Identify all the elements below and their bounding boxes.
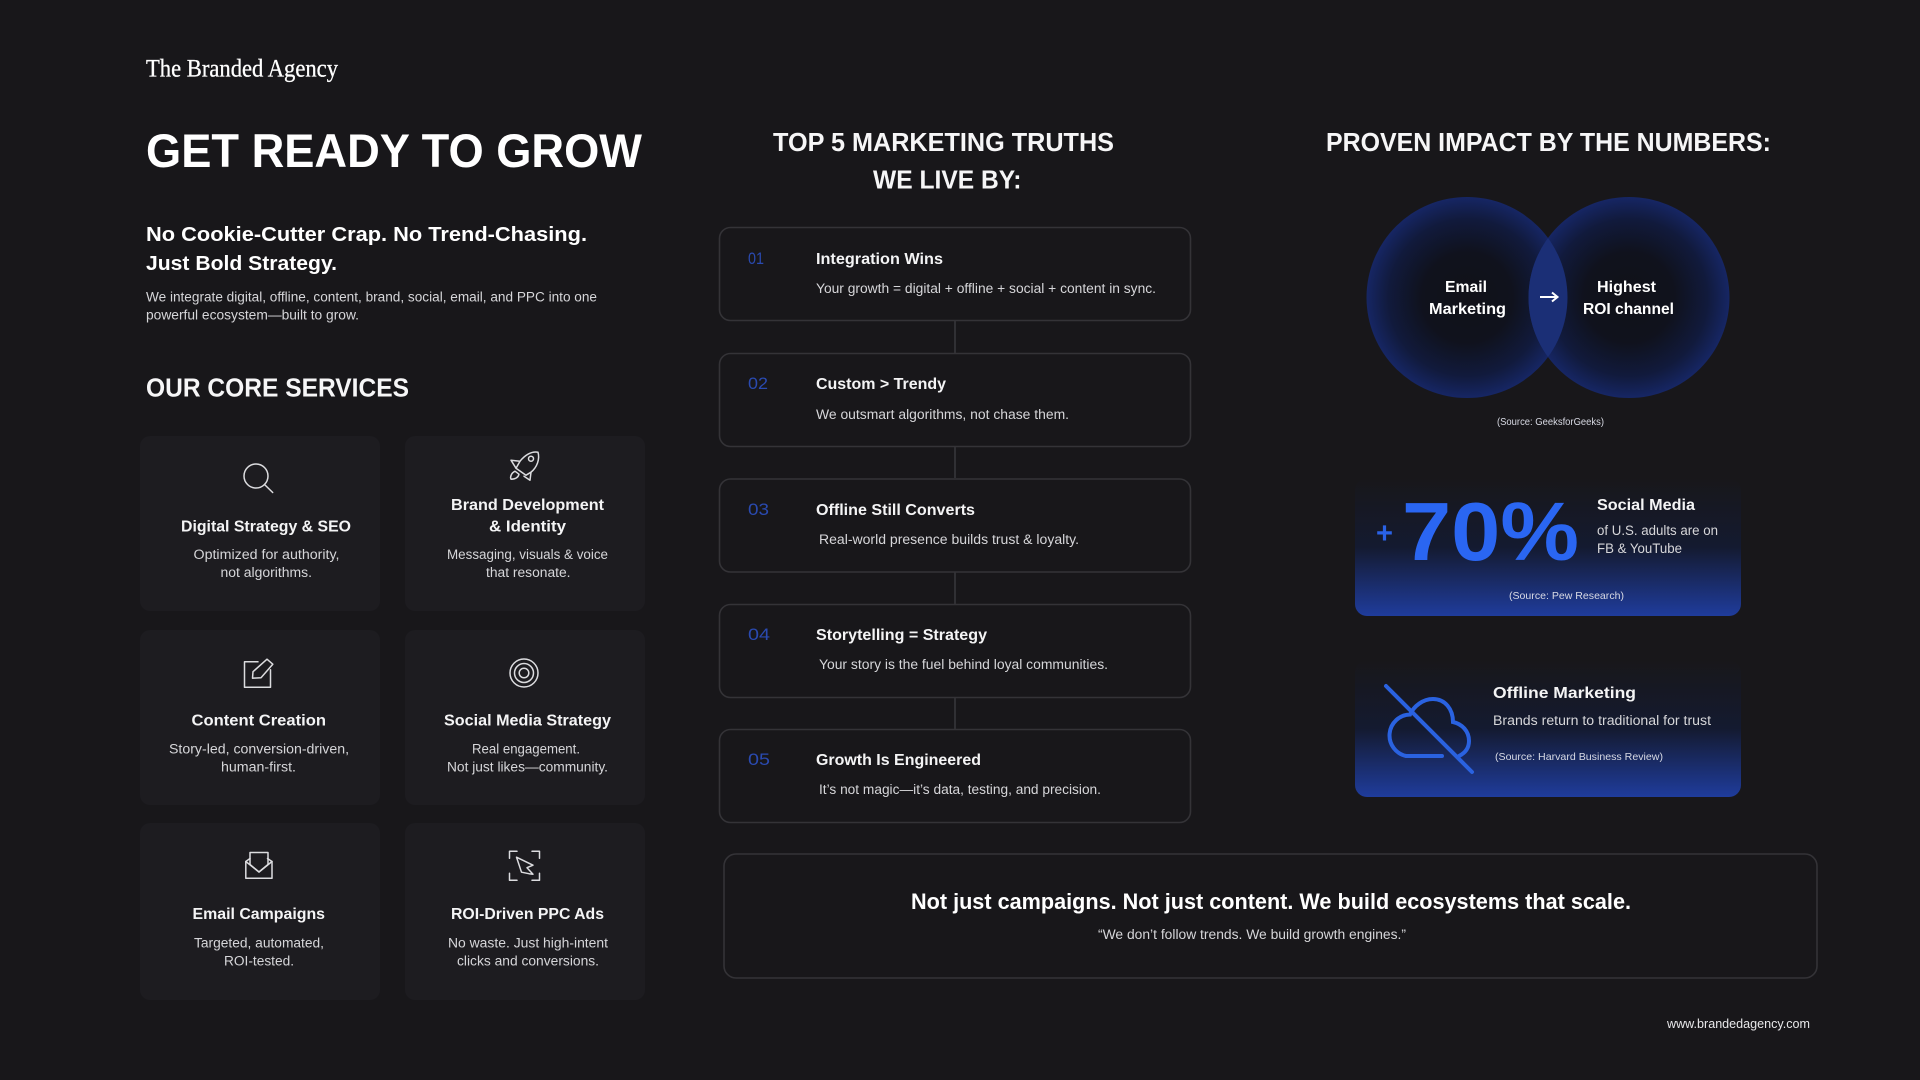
arrow xyxy=(1540,292,1558,302)
truth 03: Offline Still Converts xyxy=(816,502,975,519)
truth 03 xyxy=(720,479,1190,572)
card description: not algorithms. xyxy=(220,565,312,581)
card heading: Brand Development xyxy=(451,497,605,514)
heading: proven impact: PROVEN IMPACT BY THE NUMBERS: xyxy=(1326,129,1771,157)
venn diagram xyxy=(1366,197,1730,398)
icon: rocket xyxy=(511,452,539,480)
truth 03: 03 xyxy=(748,500,769,519)
website url: www.brandedagency.com xyxy=(1666,1016,1810,1031)
panel: social media strategy xyxy=(405,630,645,805)
card heading: Digital Strategy & SEO xyxy=(181,519,351,536)
big number: + xyxy=(1376,517,1393,550)
venn left label: Marketing xyxy=(1429,301,1506,318)
intro paragraph: We integrate digital, offline, content, brand, social, email, and PPC into one xyxy=(146,290,597,306)
heading: marketing truths: TOP 5 MARKETING TRUTHS xyxy=(773,129,1114,157)
card description xyxy=(169,741,349,775)
stat heading: Social Media xyxy=(1597,497,1695,514)
offline description: Brands return to traditional for trust xyxy=(1493,713,1711,729)
panel: digital strategy and seo xyxy=(140,436,380,611)
card description: ROI-tested. xyxy=(224,953,294,969)
icon: cursor in frame xyxy=(510,851,540,880)
panel: email campaigns xyxy=(140,823,380,1000)
icon: crossed-out cloud xyxy=(1386,686,1472,772)
truth 01 xyxy=(720,228,1190,320)
card description: that resonate. xyxy=(486,565,570,581)
truth 05: 05 xyxy=(748,750,770,769)
panel: ppc ads xyxy=(405,823,645,1000)
subheading: Just Bold Strategy. xyxy=(146,252,337,275)
connector lines xyxy=(954,321,956,729)
truth 05: It’s not magic—it’s data, testing, and precision. xyxy=(819,782,1101,798)
card description: human-first. xyxy=(221,759,296,775)
card heading: Email Campaigns xyxy=(192,906,325,923)
source note: (Source: GeeksforGeeks) xyxy=(1497,416,1604,428)
truth 02: 02 xyxy=(748,374,768,393)
card description xyxy=(448,935,608,969)
venn left label: Email xyxy=(1445,279,1487,296)
offline source: (Source: Harvard Business Review) xyxy=(1495,751,1663,763)
venn left label xyxy=(1429,279,1506,318)
panel: offline marketing xyxy=(1355,660,1741,797)
big number: 70% xyxy=(1402,485,1579,578)
truth 05 xyxy=(720,730,1190,822)
logo: The Branded Agency xyxy=(146,56,338,82)
card description: Not just likes—community. xyxy=(447,759,608,775)
truth 04: Your story is the fuel behind loyal communities. xyxy=(819,657,1108,673)
icon: envelope xyxy=(246,852,272,878)
card description: Targeted, automated, xyxy=(194,935,324,951)
truth 02: We outsmart algorithms, not chase them. xyxy=(816,407,1069,423)
truth 04: Storytelling = Strategy xyxy=(816,627,987,644)
card heading: & Identity xyxy=(489,519,566,536)
intro paragraph: powerful ecosystem—built to grow. xyxy=(146,308,359,324)
stat description: of U.S. adults are on xyxy=(1597,523,1718,539)
subheading: No Cookie-Cutter Crap. No Trend-Chasing. xyxy=(146,223,587,246)
callout quote: “We don’t follow trends. We build growth engines.” xyxy=(1098,927,1406,943)
venn right label: ROI channel xyxy=(1583,301,1674,318)
panel: social media stat xyxy=(1355,478,1741,616)
panel: brand development xyxy=(405,436,645,611)
card description xyxy=(447,741,608,775)
card description xyxy=(447,547,608,581)
card heading: Social Media Strategy xyxy=(444,713,611,730)
truth 01: Your growth = digital + offline + social + content in sync. xyxy=(816,281,1156,297)
venn right label: Highest xyxy=(1597,279,1657,296)
subheading xyxy=(146,223,587,275)
icon: pencil on square xyxy=(244,659,273,687)
stat source: (Source: Pew Research) xyxy=(1509,590,1624,602)
callout xyxy=(724,854,1817,978)
card description: Messaging, visuals & voice xyxy=(447,547,608,563)
truth 01: 01 xyxy=(748,249,764,268)
truth 04 xyxy=(720,604,1190,698)
truth 04: 04 xyxy=(748,625,770,644)
card description: Story-led, conversion-driven, xyxy=(169,741,349,757)
truth 05: Growth Is Engineered xyxy=(816,752,981,769)
card heading xyxy=(451,497,605,536)
intro paragraph xyxy=(146,290,597,324)
card description: clicks and conversions. xyxy=(457,953,599,969)
truth 02: Custom > Trendy xyxy=(816,376,946,393)
venn right label xyxy=(1583,279,1674,318)
truth 02 xyxy=(720,354,1190,446)
panel: content creation xyxy=(140,630,380,805)
card description xyxy=(194,547,340,581)
card description xyxy=(194,935,324,969)
icon: magnifying glass xyxy=(244,464,273,492)
offline heading: Offline Marketing xyxy=(1493,685,1636,702)
card heading: ROI-Driven PPC Ads xyxy=(451,906,604,923)
icon: target xyxy=(510,659,538,687)
title: GET READY TO GROW xyxy=(146,124,643,177)
truth 01: Integration Wins xyxy=(816,251,943,268)
card heading: Content Creation xyxy=(192,713,326,730)
card description: Optimized for authority, xyxy=(194,547,340,563)
callout headline: Not just campaigns. Not just content. We build ecosystems that scale. xyxy=(911,889,1631,914)
heading: marketing truths: WE LIVE BY: xyxy=(873,166,1022,194)
card description: No waste. Just high-intent xyxy=(448,935,608,951)
truth 03: Real-world presence builds trust & loyalty. xyxy=(819,532,1079,548)
card description: Real engagement. xyxy=(472,741,580,757)
stat description: FB & YouTube xyxy=(1597,541,1682,557)
stat description xyxy=(1597,523,1718,557)
heading: marketing truths xyxy=(773,129,1114,194)
heading: our core services: OUR CORE SERVICES xyxy=(146,374,409,402)
